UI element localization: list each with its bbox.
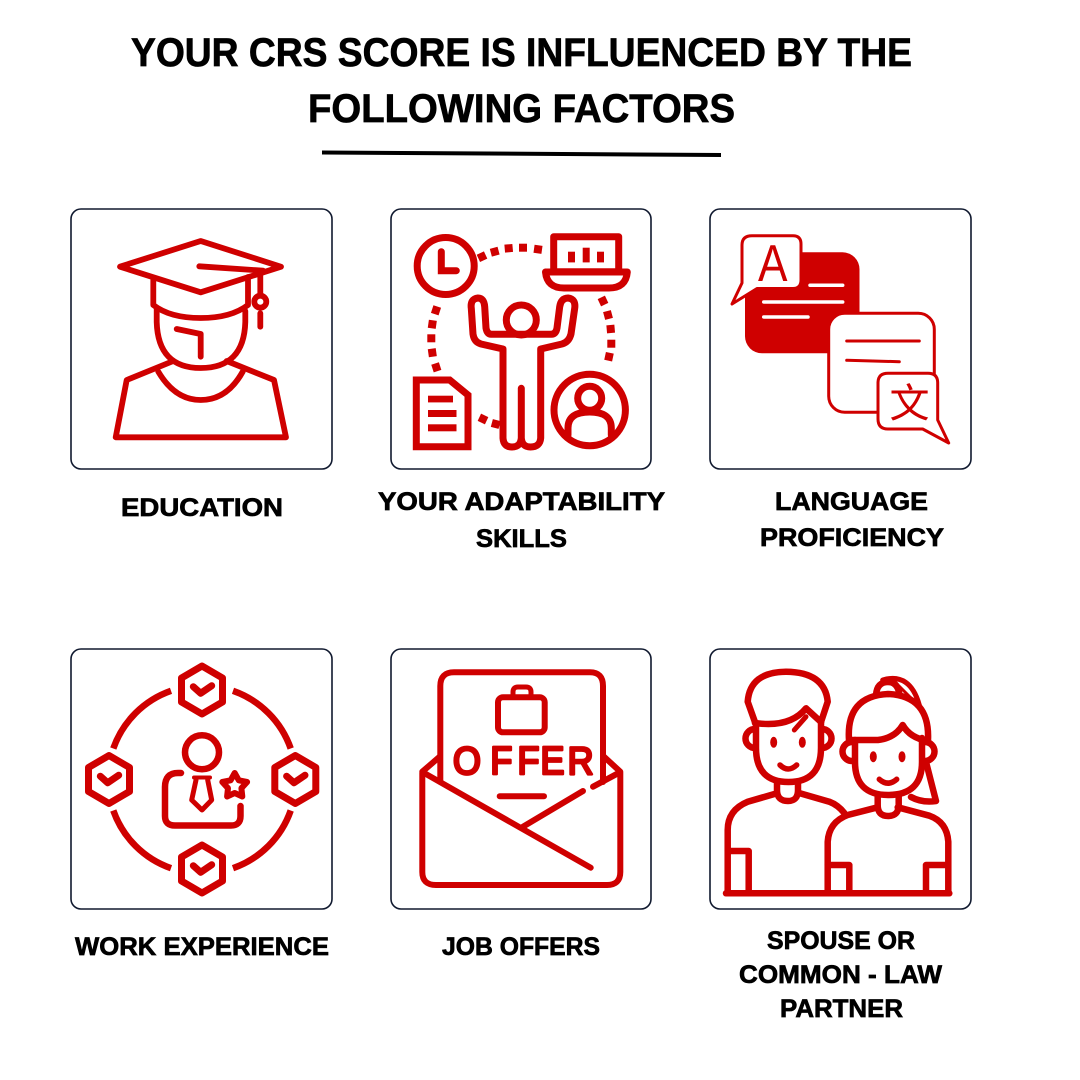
label: spouse or common-law partner	[739, 927, 942, 1023]
panel: spouse or common-law partner	[710, 649, 971, 1023]
icon: job offer letter in envelope	[422, 672, 620, 885]
panel: language proficiency	[710, 209, 971, 552]
card frame	[710, 209, 971, 469]
label: adaptability skills: YOUR ADAPTABILITY	[378, 488, 665, 516]
icon: couple	[726, 672, 949, 893]
card frame	[71, 649, 332, 909]
label: work experience: WORK EXPERIENCE	[75, 933, 329, 961]
card frame	[71, 209, 332, 469]
label: education: EDUCATION	[121, 494, 283, 522]
label: language proficiency: LANGUAGE	[775, 488, 928, 516]
label: language proficiency	[760, 488, 944, 552]
card frame	[391, 209, 651, 469]
card frame	[710, 649, 971, 909]
card frame	[391, 649, 651, 909]
panel: education	[71, 209, 332, 522]
title: YOUR CRS SCORE IS INFLUENCED BY THE	[131, 31, 912, 75]
label: language proficiency: PROFICIENCY	[760, 524, 944, 552]
icon: translation speech bubbles: 文	[890, 382, 930, 426]
title: FOLLOWING FACTORS	[308, 87, 735, 131]
icon: person with clock, laptop, document and profile	[416, 237, 627, 447]
panel: work experience	[71, 649, 332, 961]
icon: translation speech bubbles	[732, 235, 949, 443]
label: spouse or common-law partner: PARTNER	[780, 995, 903, 1023]
label: adaptability skills	[378, 488, 665, 553]
icon: job offer letter in envelope: OFFER	[453, 739, 594, 782]
label: job offers: JOB OFFERS	[442, 933, 600, 961]
panel: job offers	[391, 649, 651, 961]
icon: employee with star and check hexagons	[88, 666, 316, 893]
title	[131, 31, 912, 131]
icon: graduate with mortarboard	[116, 241, 286, 437]
label: adaptability skills: SKILLS	[476, 525, 567, 553]
label: spouse or common-law partner: SPOUSE OR	[767, 927, 915, 955]
label: spouse or common-law partner: COMMON - LAW	[739, 961, 942, 989]
panel: adaptability skills	[378, 209, 665, 553]
icon: translation speech bubbles: A	[758, 235, 788, 293]
